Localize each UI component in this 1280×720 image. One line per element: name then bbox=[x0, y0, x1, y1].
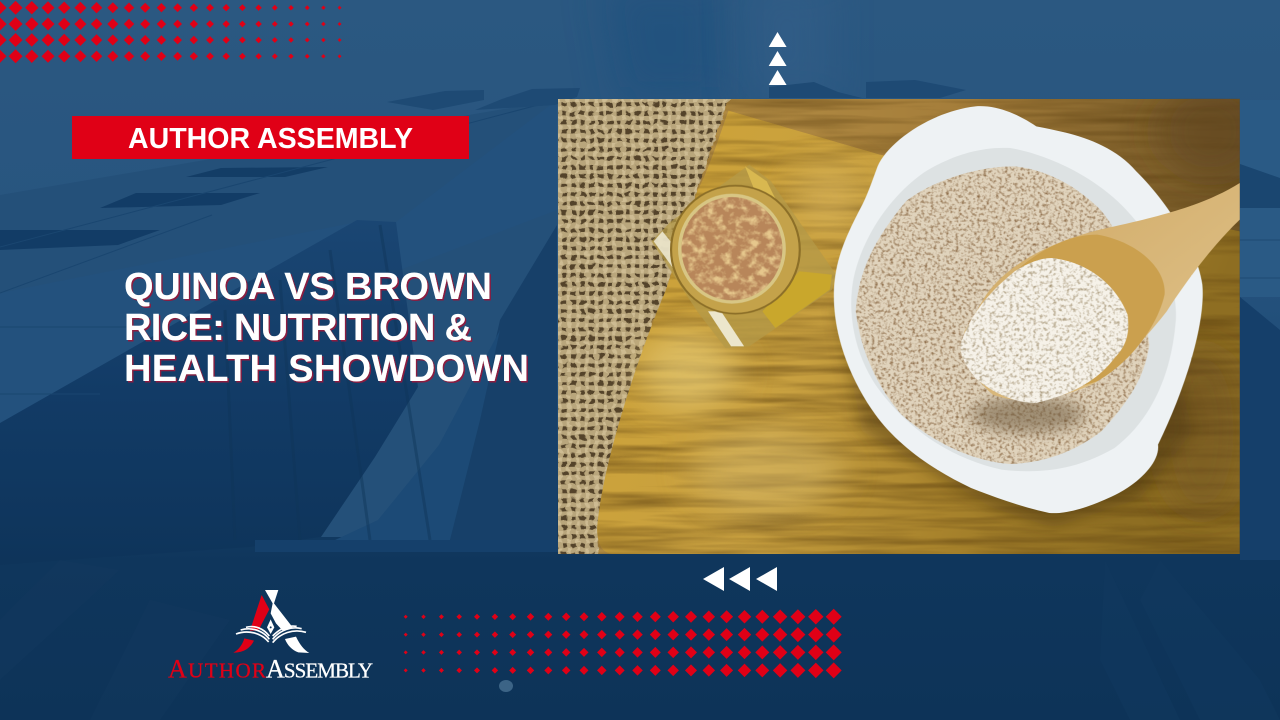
logo wordmark bbox=[168, 654, 373, 684]
wooden spoon bbox=[964, 183, 1240, 400]
brand ribbon bbox=[72, 116, 469, 159]
logo mark: letter A with pen nib and open book bbox=[233, 590, 309, 653]
logo: Author Assembly bbox=[168, 590, 373, 684]
bowl inner well bbox=[851, 148, 1176, 471]
bowl shadow bbox=[836, 305, 1193, 528]
arrow: three upward triangles bbox=[769, 32, 787, 85]
wooden table bbox=[558, 98, 1240, 554]
title: QUINOA VS BROWN bbox=[124, 266, 492, 308]
title: RICE: NUTRITION & bbox=[124, 307, 472, 349]
decorative dot grid: bottom bbox=[404, 609, 842, 678]
glass jar bbox=[651, 165, 836, 348]
title: HEALTH SHOWDOWN bbox=[124, 348, 529, 390]
sesame seeds in bowl bbox=[856, 166, 1149, 464]
burlap cloth bbox=[549, 91, 732, 565]
arrow: three leftward triangles bbox=[703, 567, 777, 591]
logo wordmark: ASSEMBLY bbox=[266, 654, 373, 684]
decorative dot grid: top left bbox=[0, 0, 341, 64]
cork lid bbox=[681, 197, 782, 300]
sesame seeds on spoon bbox=[961, 258, 1128, 403]
logo wordmark: AUTHOR bbox=[168, 654, 266, 684]
photo: sesame seeds in a white bowl on a wooden board bbox=[549, 85, 1262, 565]
cutting board bbox=[597, 111, 1240, 554]
brand ribbon: AUTHOR ASSEMBLY bbox=[128, 123, 413, 155]
spoon bowl bbox=[1018, 234, 1165, 386]
light patches on board bbox=[641, 85, 1262, 518]
shadow under spoon bbox=[971, 396, 1084, 433]
title bbox=[124, 266, 529, 390]
white bowl bbox=[834, 106, 1203, 513]
